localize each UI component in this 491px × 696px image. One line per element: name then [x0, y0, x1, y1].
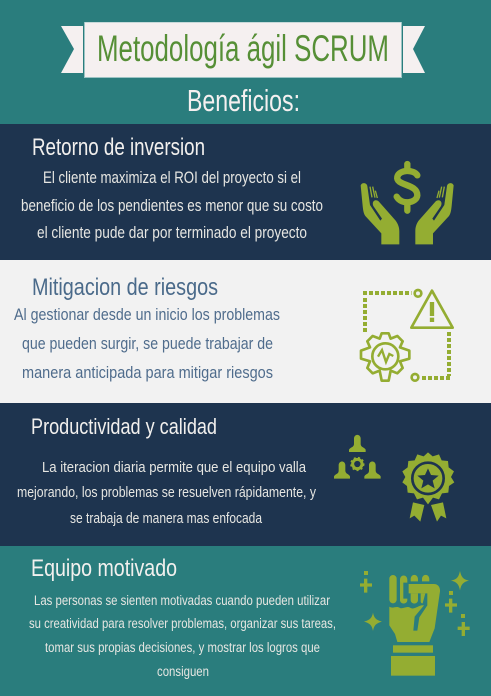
panel: header background — [0, 0, 491, 124]
body text: mejorando, los problemas se resuelven rápidamente, y — [17, 485, 317, 501]
heading: Retorno de inversion — [32, 134, 205, 161]
body text: el cliente pude dar por terminado el proyecto — [37, 224, 307, 242]
body text: consiguen — [157, 664, 209, 679]
heading: Mitigacion de riesgos — [32, 274, 218, 301]
body text — [29, 593, 336, 679]
body text: Las personas se sienten motivadas cuando pueden utilizar — [34, 593, 330, 608]
icon: risk gear and warning — [361, 290, 453, 381]
body text — [14, 306, 280, 382]
heading: Equipo motivado — [31, 555, 177, 582]
body text: manera anticipada para mitigar riesgos — [22, 364, 273, 382]
body text — [21, 169, 323, 242]
panel: productividad y calidad — [0, 403, 491, 546]
panel: retorno de inversion — [0, 124, 491, 260]
panel: equipo motivado — [0, 546, 491, 696]
body text: Al gestionar desde un inicio los problemas — [14, 306, 280, 324]
panel: mitigacion de riesgos — [0, 260, 491, 403]
body text: El cliente maximiza el ROI del proyecto si el — [43, 169, 301, 187]
body text: se trabaja de manera mas enfocada — [70, 511, 263, 527]
heading: Productividad y calidad — [31, 414, 217, 439]
icon: award rosette — [402, 452, 454, 522]
icon: team with gear — [334, 435, 381, 479]
body text: su creatividad para resolver problemas, organizar sus tareas, — [29, 616, 336, 631]
subtitle: Beneficios: — [187, 83, 300, 118]
body text: beneficio de los pendientes es menor que su costo — [21, 197, 323, 215]
body text — [17, 460, 317, 527]
body text: tomar sus propias decisiones, y mostrar los logros que — [45, 640, 320, 655]
title banner — [61, 22, 425, 78]
body text: La iteracion diaria permite que el equipo valla — [42, 460, 307, 476]
icon: hands holding dollar — [361, 164, 454, 244]
body text: que pueden surgir, se puede trabajar de — [22, 335, 273, 353]
icon: raised fist with sparkles — [360, 571, 470, 676]
